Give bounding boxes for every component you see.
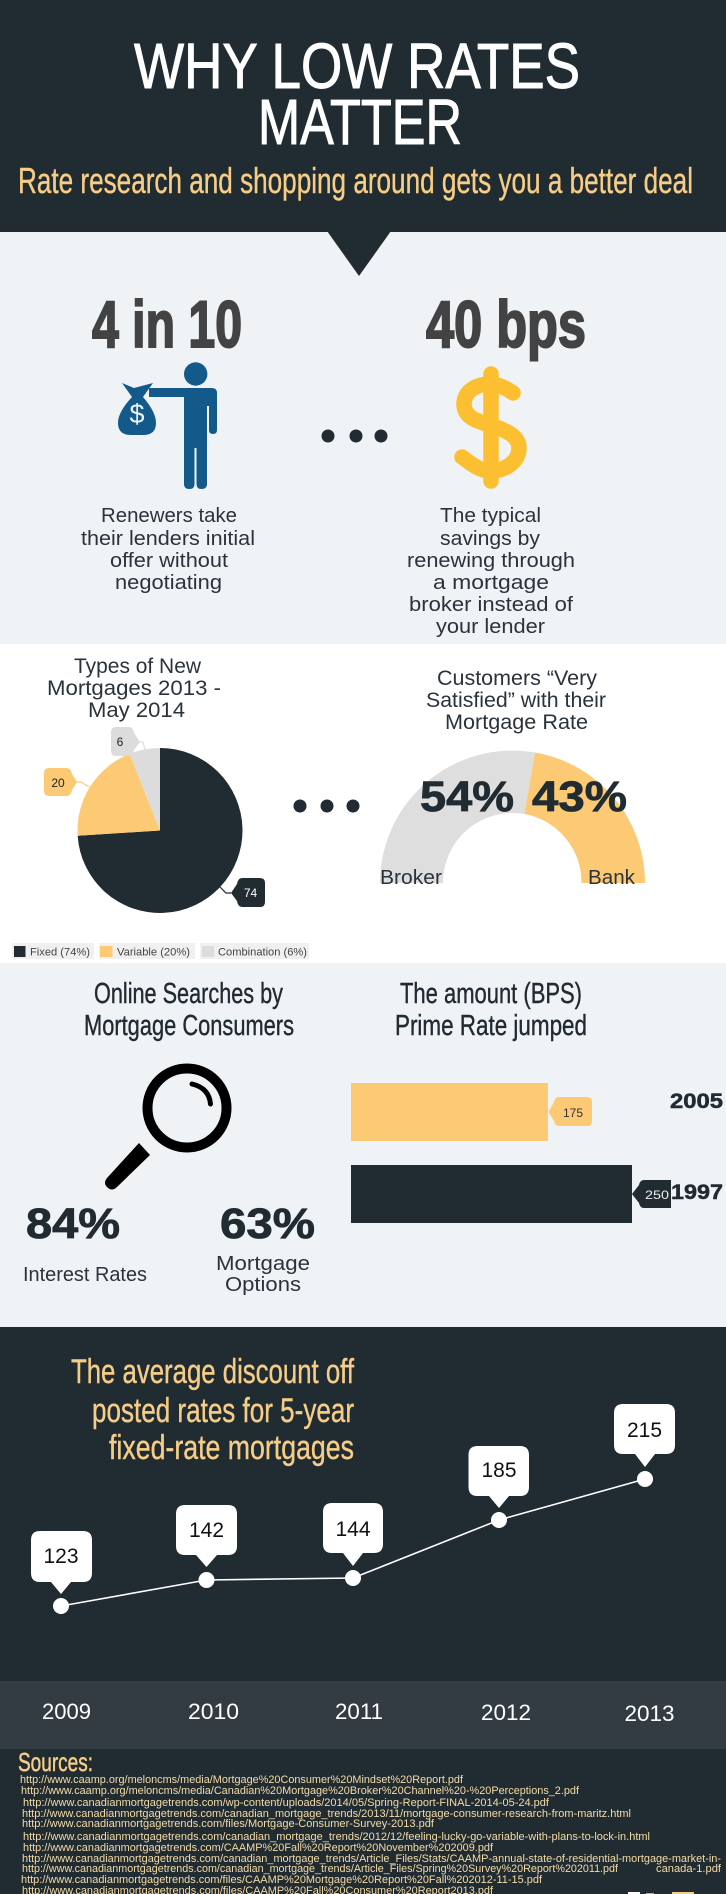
- title: [134, 30, 580, 158]
- label: mortgage options: [216, 1253, 310, 1296]
- year labels: 2013: [624, 1701, 674, 1726]
- source links: http://www.canadianmortgagetrends.com/wp-content/uploads/2014/05/Spring-Report-FINAL-2014-05-24.pdf: [23, 1797, 550, 1809]
- text: renewers take initial offer: Renewers take: [101, 505, 237, 527]
- label: bank: Bank: [588, 867, 636, 889]
- heading: customers very satisfied: [426, 667, 606, 734]
- legend: Fixed (74%): [30, 946, 90, 958]
- callout: 144: 144: [335, 1518, 371, 1541]
- year labels: 2011: [335, 1699, 383, 1724]
- panel: year axis band: [0, 1681, 726, 1749]
- value: broker 54%: 54%: [420, 773, 514, 821]
- source links: http://www.caamp.org/meloncms/media/Canadian%20Mortgage%20Broker%20Channel%20-%20Perceptions_2.pdf: [21, 1785, 580, 1797]
- heading: types of new mortgages: May 2014: [88, 699, 185, 722]
- heading: online searches: Mortgage Consumers: [84, 1010, 294, 1042]
- icon: person holding money bag: [118, 362, 217, 489]
- stat: 84%: 84%: [26, 1200, 120, 1248]
- source links: http://www.canadianmortgagetrends.com/canadian_mortgage_trends/Article_Files/Spring%20Survey%20Report%202011.pdf: [22, 1863, 619, 1875]
- text: renewers take initial offer: their lenders initial: [81, 528, 255, 550]
- year labels: 2010: [188, 1699, 239, 1724]
- pie chart: [44, 727, 265, 913]
- heading: prime rate jump: [395, 978, 587, 1042]
- heading: online searches: [84, 978, 294, 1042]
- source links: canada-1.pdf: [656, 1863, 722, 1875]
- title: MATTER: [258, 86, 462, 158]
- panel: online searches and prime rate: [0, 963, 726, 1327]
- icon: three dots: [322, 430, 388, 442]
- value label: 175: 175: [563, 1106, 583, 1120]
- line chart: [31, 1404, 675, 1614]
- pie label: 20: 20: [51, 776, 65, 790]
- stat: 40 bps: 40 bps: [426, 287, 586, 361]
- heading: customers very satisfied: Customers “Very: [437, 667, 598, 690]
- panel: key statistics: [0, 232, 726, 644]
- heading: average discount: fixed-rate mortgages: [109, 1429, 354, 1467]
- heading: prime rate jump: Prime Rate jumped: [395, 1010, 587, 1042]
- legend: [12, 943, 309, 959]
- heading: prime rate jump: The amount (BPS): [400, 978, 582, 1010]
- heading: customers very satisfied: Satisfied” with their: [426, 689, 606, 712]
- pie label: 6: 6: [117, 735, 124, 749]
- source links: http://www.canadianmortgagetrends.com/CAAMP%20Fall%20Report%20November%202009.pdf: [23, 1842, 494, 1854]
- text: typical savings: savings by: [440, 528, 540, 550]
- value label: 175: [548, 1097, 592, 1126]
- label: mortgage options: Mortgage: [216, 1253, 310, 1275]
- heading: types of new mortgages: [47, 655, 221, 722]
- callout: 123: 123: [43, 1545, 79, 1568]
- year labels: 2012: [481, 1700, 531, 1725]
- legend: Variable (20%): [117, 946, 190, 958]
- callout: 123: [31, 1531, 92, 1594]
- callout: 185: [468, 1446, 529, 1508]
- text: typical savings: The typical: [440, 505, 541, 527]
- icon: person holding money bag: $: [129, 399, 145, 429]
- source links: http://www.canadianmortgagetrends.com/files/CAAMP%20Mortgage%20Report%20Fall%202012-11-15.pdf: [21, 1874, 543, 1886]
- heading: types of new mortgages: Mortgages 2013 -: [47, 677, 221, 700]
- heading: average discount: [71, 1353, 354, 1467]
- text: renewers take initial offer: negotiating: [115, 572, 222, 594]
- pie label: 74: 74: [244, 886, 257, 900]
- source links: http://www.caamp.org/meloncms/media/Mortgage%20Consumer%20Mindset%20Report.pdf: [20, 1774, 464, 1786]
- panel: header: [0, 0, 726, 276]
- source links: http://www.canadianmortgagetrends.com/canadian_mortgage_trends/2012/12/feeling-lucky-go-variable-with-plans-to-lock-in.html: [23, 1831, 650, 1843]
- icon: three dots: [294, 800, 360, 812]
- label: broker: Broker: [380, 867, 442, 889]
- text: typical savings: [407, 505, 575, 638]
- icon: magnifying glass: [105, 1068, 226, 1190]
- heading: customers very satisfied: Mortgage Rate: [445, 711, 588, 734]
- source links: [20, 1774, 722, 1894]
- semicircle chart: [380, 751, 645, 889]
- year labels: [42, 1699, 674, 1726]
- pie label: 20: [44, 768, 89, 796]
- callout: 215: [614, 1404, 675, 1467]
- year labels: 2009: [42, 1699, 91, 1724]
- value label: 250: 250: [645, 1188, 669, 1202]
- stat: 4 in 10: 4 in 10: [92, 287, 242, 361]
- callout: 185: 185: [481, 1459, 517, 1482]
- axis label: 1997: 1997: [671, 1181, 723, 1204]
- text: renewers take initial offer: [81, 505, 255, 594]
- panel: mortgage types and satisfaction: [0, 644, 726, 963]
- heading: average discount: The average discount off: [71, 1353, 354, 1391]
- value label: 250: [632, 1180, 671, 1208]
- pie label: 74: [220, 878, 265, 907]
- label: interest rates: Interest Rates: [23, 1264, 147, 1286]
- source links: http://www.canadianmortgagetrends.com/files/Mortgage-Consumer-Survey-2013.pdf: [22, 1818, 435, 1830]
- panel: average discount line chart: [0, 1327, 726, 1681]
- heading: average discount: posted rates for 5-year: [92, 1392, 354, 1430]
- callout: 142: [176, 1505, 237, 1567]
- bar: 1997: [351, 1165, 632, 1223]
- legend: Combination (6%): [218, 946, 307, 958]
- callout: 144: [323, 1503, 383, 1566]
- callout: 142: 142: [189, 1519, 224, 1542]
- logo fragment: [628, 1892, 694, 1894]
- pie label: 6: [111, 727, 145, 756]
- axis label: 2005: 2005: [670, 1090, 723, 1113]
- text: typical savings: your lender: [436, 616, 545, 638]
- stat: 63%: 63%: [220, 1200, 315, 1248]
- heading: online searches: Online Searches by: [94, 978, 283, 1010]
- title: WHY LOW RATES: [134, 30, 580, 102]
- label: mortgage options: Options: [225, 1274, 301, 1296]
- value: bank 43%: 43%: [532, 773, 627, 821]
- callout: 215: 215: [627, 1419, 662, 1442]
- bar: 2005: [351, 1083, 548, 1141]
- source links: http://www.canadianmortgagetrends.com/canadian_mortgage_trends/2013/11/mortgage-consumer-research-from-maritz.html: [22, 1808, 631, 1820]
- icon: dollar sign: [462, 374, 519, 481]
- text: typical savings: a mortgage: [433, 572, 549, 594]
- text: typical savings: broker instead of: [409, 594, 573, 616]
- heading: types of new mortgages: Types of New: [74, 655, 202, 678]
- bar chart: [351, 1083, 723, 1223]
- text: renewers take initial offer: offer without: [110, 550, 228, 572]
- heading: sources: Sources:: [18, 1747, 93, 1777]
- text: typical savings: renewing through: [407, 550, 575, 572]
- source links: http://www.canadianmortgagetrends.com/canadian_mortgage_trends/Article_Files/Stats/CAAMP-annual-state-of-residential-mortgage-market-in-: [22, 1853, 721, 1865]
- panel: sources: [0, 1747, 726, 1894]
